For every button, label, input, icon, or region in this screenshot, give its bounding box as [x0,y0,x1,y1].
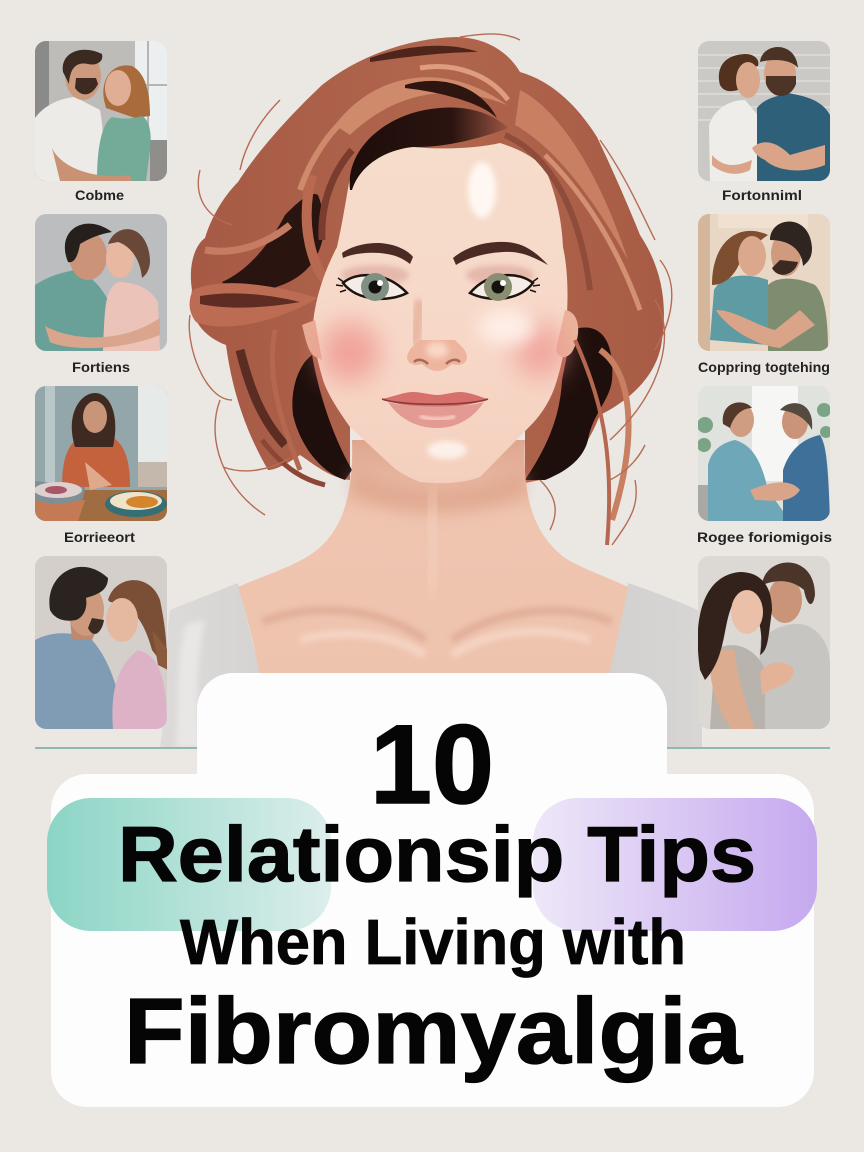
hair dark right [525,327,612,480]
shirt [160,583,702,748]
hair crown dark band [350,107,508,190]
heading number: 10 [370,702,494,827]
forehead highlight [468,162,496,218]
caption: Cobme: Cobme [75,188,125,203]
eye shadow [341,265,409,285]
ear left [302,320,322,360]
heading line: Relationsip Tips: Relationsip Tips [118,810,756,898]
pill: mint [47,798,331,931]
neck shading [352,470,525,514]
caption: Fortiens: Fortiens [72,360,130,375]
hair streaks [335,77,507,135]
eye left [343,275,407,299]
heading line: When Living with: When Living with [180,906,686,978]
photo: couple embracing, top left [35,41,167,181]
face [313,143,568,483]
chin highlight [427,441,467,459]
hair base [191,37,664,483]
title panel [47,673,817,1107]
photo: couple heads together, second left [35,214,167,351]
photo: woman at table with food [34,386,167,521]
nose [415,300,420,345]
divider line [35,747,830,749]
neck and chest [238,440,628,690]
photo: couple face to face, bottom left [35,556,168,729]
ear right [556,310,578,357]
caption: Coppring togtehing: Coppring togtehing [698,360,830,375]
photo: couple, top right [698,41,830,181]
hair dark left [222,194,324,293]
cheek highlight [479,309,535,345]
eyebrows [342,243,413,264]
photo: couple sitting holding hands, third right [697,386,832,521]
caption: Fortonniml: Fortonniml [722,188,802,203]
panel: top tab behind number [197,673,667,863]
eye right [470,275,533,299]
photo: couple close, bottom right [698,556,830,729]
caption: Eorrieeort: Eorrieeort [64,530,136,545]
blush left [320,322,380,382]
mouth [382,392,488,407]
panel: white main card [51,774,814,1107]
illustration: smiling woman portrait [160,34,702,748]
photo: couple hugging, second right [698,214,830,351]
loose hair strands [189,34,672,545]
heading line: Fibromyalgia: Fibromyalgia [124,979,743,1083]
hair swoop left [190,283,318,327]
caption: Rogee foriomigois: Rogee foriomigois [697,530,832,545]
blush right [514,322,566,378]
pill: lilac [533,798,817,931]
